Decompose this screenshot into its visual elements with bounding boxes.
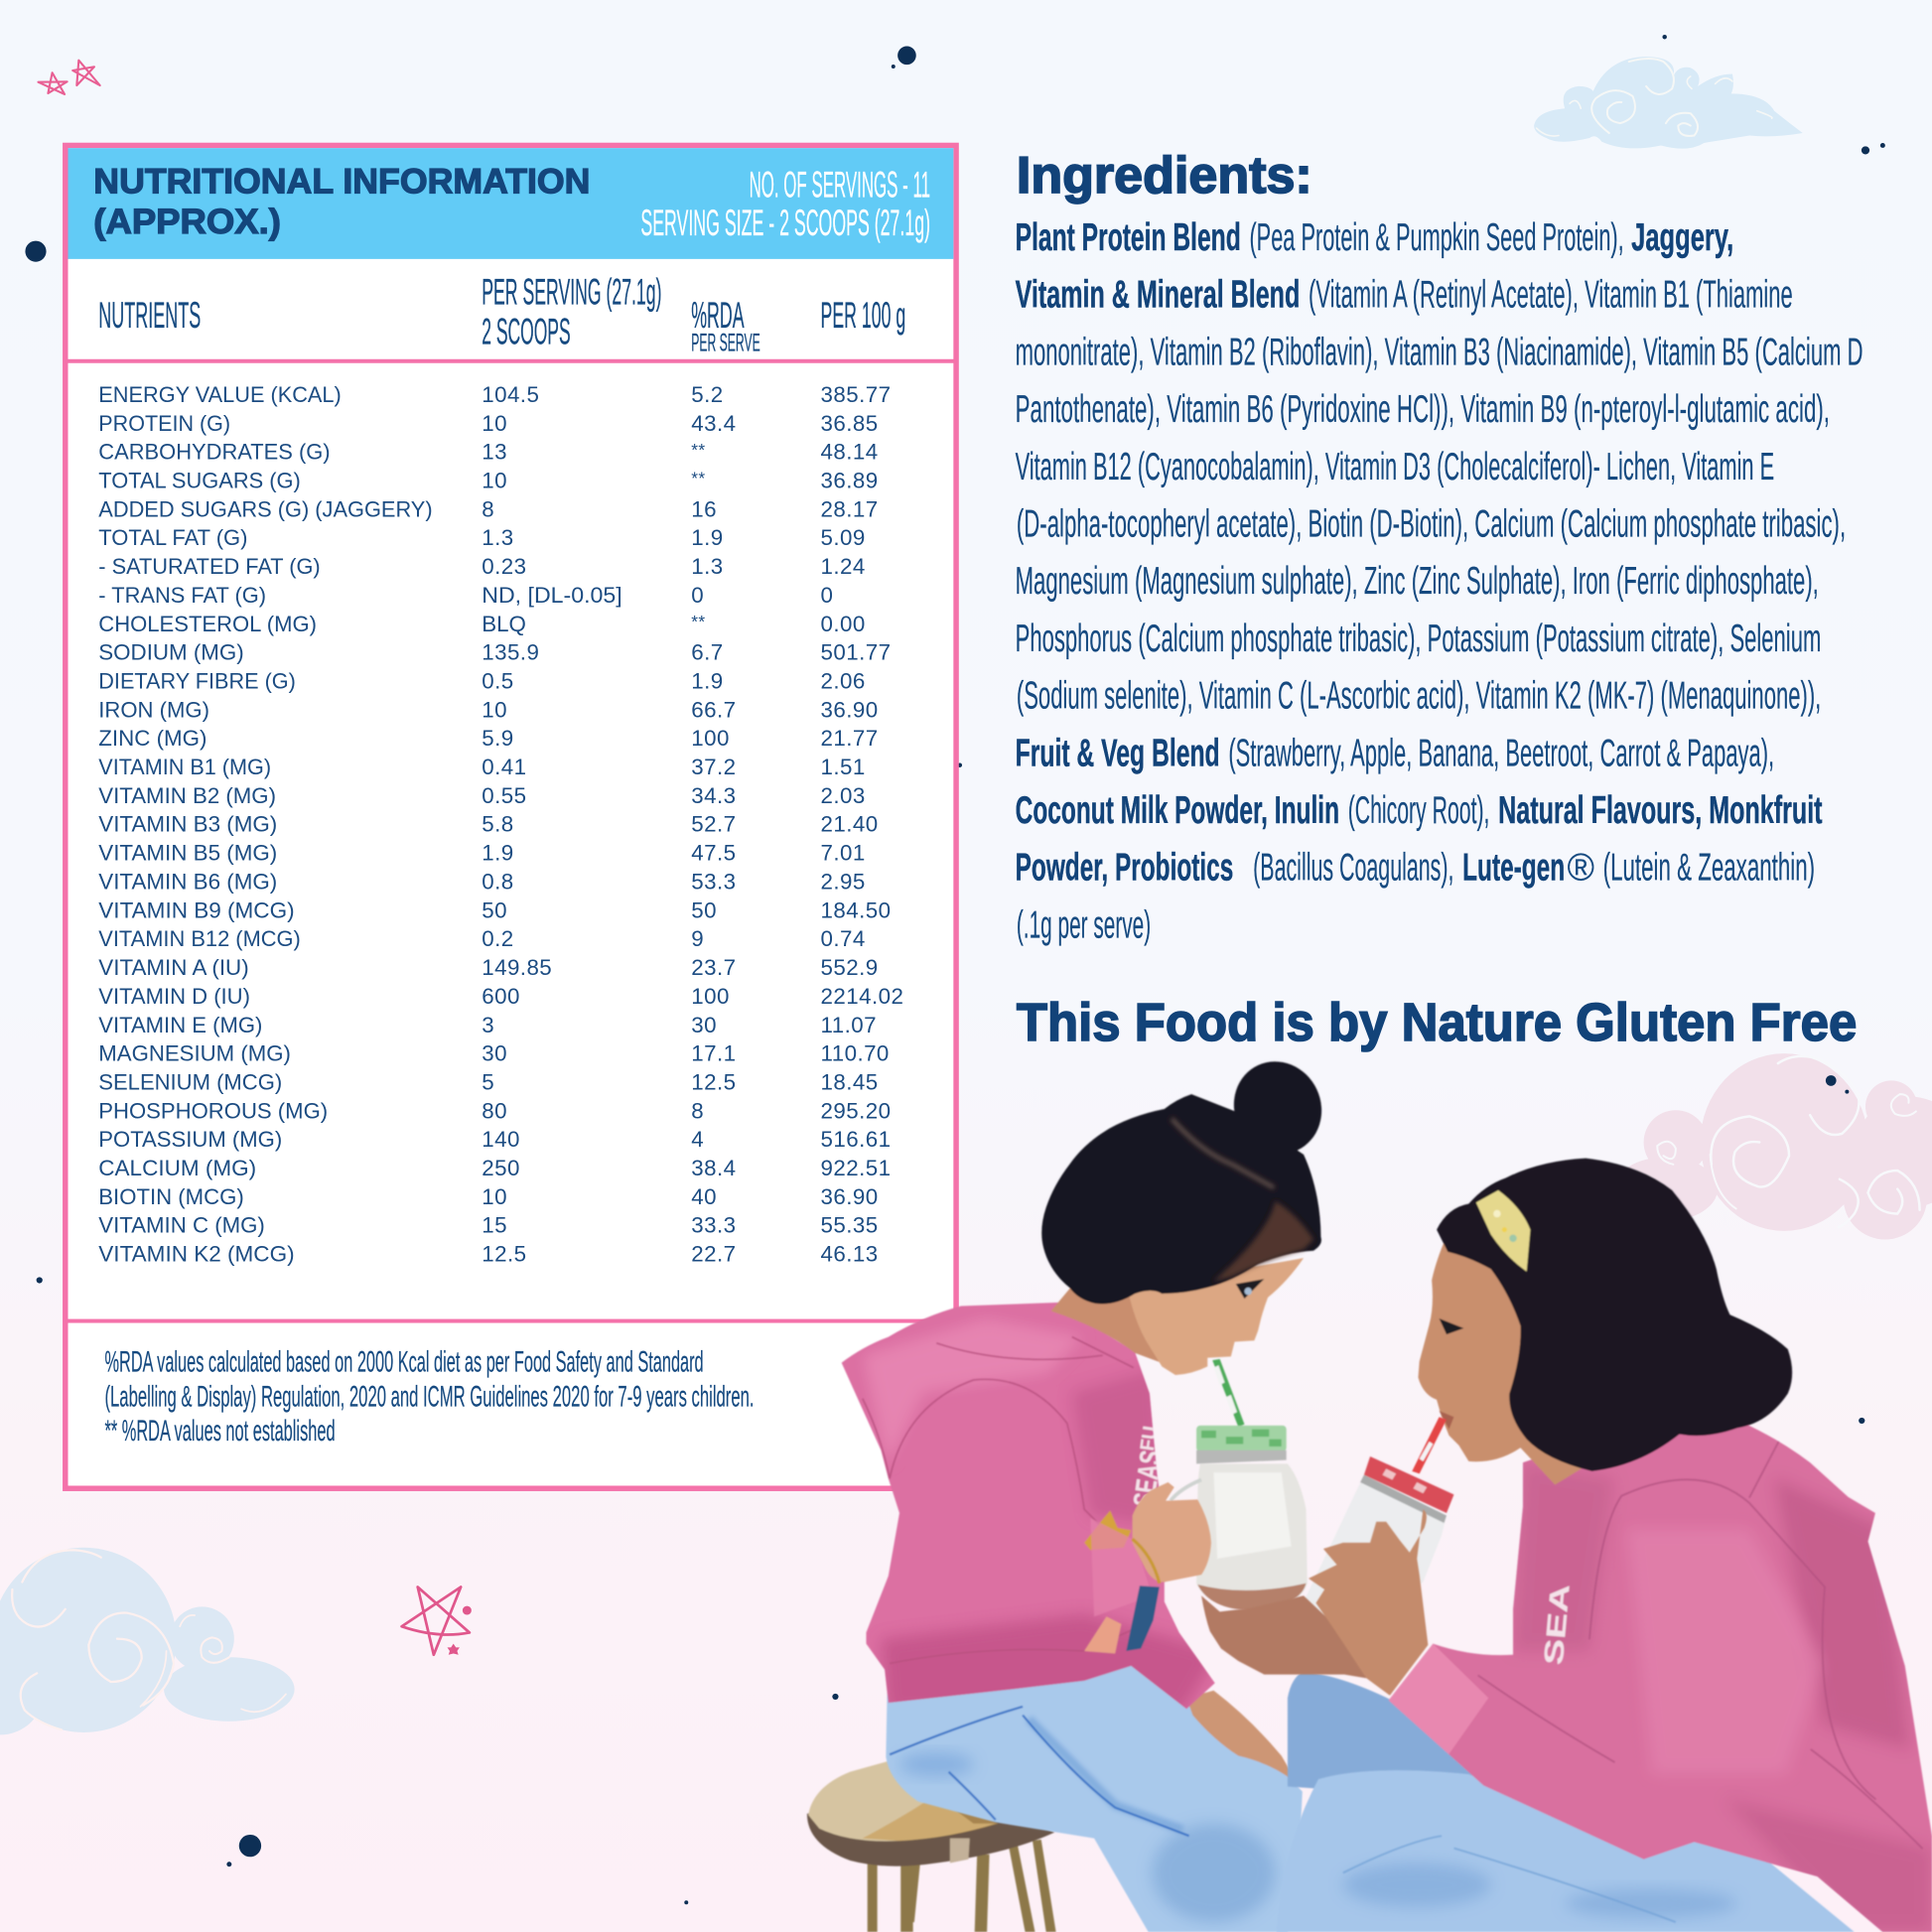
ingredients text block: Lute-gen <box>1462 847 1565 890</box>
nutrient rows: 100 <box>691 726 730 751</box>
nutrient rows: 2.06 <box>821 669 866 694</box>
nutrient rows: DIETARY FIBRE (G) <box>98 669 296 694</box>
nutrient rows: VITAMIN B12 (MCG) <box>98 926 301 951</box>
hair <box>1041 1094 1321 1304</box>
nutrient rows: 12.5 <box>691 1069 736 1094</box>
nutrient rows: 135.9 <box>482 640 539 665</box>
column headings <box>98 271 905 357</box>
ingredients text block: Fruit & Veg Blend <box>1016 732 1220 774</box>
ingredients text block: Plant Protein Blend <box>1016 216 1241 259</box>
nutrient rows: 5.2 <box>691 382 724 407</box>
nutrient rows: 100 <box>691 984 730 1009</box>
nutrient rows: ND, [DL-0.05] <box>482 583 622 608</box>
nutrient rows: 15 <box>482 1213 507 1238</box>
nutrient rows: 0.8 <box>482 869 514 894</box>
column headings: 2 SCOOPS <box>482 311 571 352</box>
nutrient rows: 37.2 <box>691 755 736 779</box>
nutrient rows: 0.23 <box>482 554 526 579</box>
column headings: %RDA <box>691 294 745 336</box>
nutrient rows: 47.5 <box>691 841 736 866</box>
cloud: bottom left <box>0 1548 295 1734</box>
cuff pattern <box>1126 1586 1160 1651</box>
nutrient rows: ** <box>691 440 706 460</box>
nutrient rows: 40 <box>691 1184 717 1209</box>
nutrient rows: 1.9 <box>691 525 724 550</box>
nutrient rows: ** <box>691 469 706 488</box>
photo: left jar with green lid <box>1171 1359 1308 1610</box>
nutrient rows: VITAMIN D (IU) <box>98 984 250 1009</box>
nutrient rows: ZINC (MG) <box>98 726 207 751</box>
gold bangle <box>1133 1539 1160 1584</box>
title <box>93 163 590 241</box>
headband <box>1476 1190 1530 1272</box>
face <box>1418 1242 1595 1484</box>
nutrient rows: SODIUM (MG) <box>98 640 244 665</box>
nutrient rows: VITAMIN B1 (MG) <box>98 755 271 779</box>
nutrient rows: 0.5 <box>482 669 514 694</box>
ingredients text block: Jaggery, <box>1631 216 1733 259</box>
nutrient rows: 516.61 <box>821 1127 891 1152</box>
ingredients text block: (.1g per serve) <box>1017 903 1151 946</box>
nutrient rows: 10 <box>482 411 507 436</box>
heading: gluten free: This Food is by Nature Gluten Free <box>1017 994 1857 1052</box>
nutrient rows: 36.90 <box>821 697 879 722</box>
nutrient rows: 11.07 <box>821 1013 877 1037</box>
hoodie <box>842 1303 1220 1713</box>
nutrient rows: 250 <box>482 1156 520 1180</box>
nutrient rows: ENERGY VALUE (KCAL) <box>98 382 342 407</box>
nutrient rows: 36.85 <box>821 411 879 436</box>
front leg <box>1277 1770 1855 1932</box>
footnote: (Labelling & Display) Regulation, 2020 and ICMR Guidelines 2020 for 7-9 years children. <box>104 1381 755 1414</box>
nutrient rows: 55.35 <box>821 1213 879 1238</box>
nutrient rows: VITAMIN B9 (MCG) <box>98 897 295 922</box>
nutrient rows: 0.00 <box>821 612 866 636</box>
cloud: top right <box>1534 57 1803 149</box>
nutrient rows: 12.5 <box>482 1242 526 1267</box>
nutrient rows: 0.41 <box>482 755 526 779</box>
table header band <box>69 148 953 259</box>
ingredients text block: Powder, Probiotics <box>1016 847 1233 890</box>
nutrient rows: 1.3 <box>482 525 514 550</box>
nutrient rows: 1.51 <box>821 755 866 779</box>
eye and lips <box>1440 1318 1463 1430</box>
hoodie: FU <box>1137 1425 1162 1452</box>
panel: nutrition table <box>66 145 956 1488</box>
nutrient rows: BLQ <box>482 612 526 636</box>
nutrient rows: VITAMIN E (MG) <box>98 1013 262 1037</box>
nutrient rows: - SATURATED FAT (G) <box>98 554 321 579</box>
nutrient rows: 5.9 <box>482 726 514 751</box>
nutrient rows: 6.7 <box>691 640 724 665</box>
nutrient rows: 501.77 <box>821 640 891 665</box>
nutrient rows: 21.40 <box>821 812 879 837</box>
table header band: NO. OF SERVINGS - 11 <box>750 164 930 206</box>
nutrient rows: MAGNESIUM (MG) <box>98 1041 291 1066</box>
nutrient rows: 30 <box>691 1013 717 1037</box>
nutrient rows: 104.5 <box>482 382 539 407</box>
jeans <box>886 1663 1303 1932</box>
nutrient rows: 5.09 <box>821 525 866 550</box>
nutrient rows: CARBOHYDRATES (G) <box>98 440 331 465</box>
nutrient rows: 21.77 <box>821 726 879 751</box>
icon: two small stars <box>38 61 100 94</box>
nutrient rows <box>98 382 903 1267</box>
nutrient rows: 295.20 <box>821 1098 891 1123</box>
nutrient rows: 80 <box>482 1098 507 1123</box>
nutrient rows: 110.70 <box>821 1041 890 1066</box>
nutrient rows: VITAMIN B6 (MG) <box>98 869 277 894</box>
ingredients text block: Vitamin & Mineral Blend <box>1016 274 1300 317</box>
nutrient rows: 23.7 <box>691 955 736 980</box>
nutrient rows: 52.7 <box>691 812 736 837</box>
nutrient rows: VITAMIN C (MG) <box>98 1213 265 1238</box>
footnote: ** %RDA values not established <box>104 1415 336 1448</box>
table header band: SERVING SIZE - 2 SCOOPS (27.1g) <box>640 202 930 243</box>
nutrient rows: - TRANS FAT (G) <box>98 583 266 608</box>
face <box>1128 1258 1304 1375</box>
nutrient rows: VITAMIN B3 (MG) <box>98 812 277 837</box>
nutrient rows: 1.24 <box>821 554 866 579</box>
table box <box>66 145 956 1488</box>
hair <box>1437 1159 1792 1471</box>
sleeve cuff <box>1090 1518 1152 1616</box>
title: NUTRITIONAL INFORMATION <box>93 163 590 201</box>
photo: left child <box>842 1047 1336 1932</box>
nutrient rows: 22.7 <box>691 1242 736 1267</box>
nutrient rows: 1.9 <box>482 841 514 866</box>
nutrient rows: 1.3 <box>691 554 724 579</box>
hoodie patches <box>1084 1511 1131 1654</box>
column headings: NUTRIENTS <box>98 294 201 336</box>
hoodie <box>1389 1417 1932 1932</box>
jar handle <box>1171 1480 1201 1501</box>
nutrient rows: CHOLESTEROL (MG) <box>98 612 317 636</box>
nutrient rows: 36.89 <box>821 468 879 492</box>
nutrient rows: 0.74 <box>821 926 866 951</box>
nutrient rows: 385.77 <box>821 382 891 407</box>
nutrient rows: 38.4 <box>691 1156 736 1180</box>
ingredients text block: (Bacillus Coagulans), <box>1253 847 1453 890</box>
rear leg <box>1288 1672 1509 1801</box>
nutrient rows: 2.03 <box>821 783 866 808</box>
nutrient rows: PROTEIN (G) <box>98 411 230 436</box>
nutrient rows: 33.3 <box>691 1213 736 1238</box>
nutrient rows: 9 <box>691 926 704 951</box>
left child's hand <box>1133 1482 1211 1583</box>
nutrient rows: 50 <box>482 897 507 922</box>
footnote <box>104 1346 755 1448</box>
nutrient rows: 18.45 <box>821 1069 879 1094</box>
nutrient rows: VITAMIN B2 (MG) <box>98 783 276 808</box>
title: (APPROX.) <box>93 204 281 241</box>
ingredients text block: ® <box>1568 847 1594 890</box>
nutrient rows: 43.4 <box>691 411 736 436</box>
nutrient rows: 46.13 <box>821 1242 879 1267</box>
footnote: %RDA values calculated based on 2000 Kcal diet as per Food Safety and Standard <box>104 1346 704 1379</box>
nutrient rows: 149.85 <box>482 955 552 980</box>
nutrient rows: 140 <box>482 1127 520 1152</box>
nutrient rows: 34.3 <box>691 783 736 808</box>
ingredients text block: (Chicory Root), <box>1348 789 1489 832</box>
icon: large star <box>402 1587 472 1655</box>
nutrient rows: 28.17 <box>821 496 879 521</box>
nutrient rows: 2.95 <box>821 869 866 894</box>
column headings: PER SERVING (27.1g) <box>482 271 661 313</box>
nutrient rows: 10 <box>482 697 507 722</box>
nutrient rows: 0 <box>691 583 704 608</box>
photo: stool <box>807 1760 1056 1932</box>
nutrient rows: 50 <box>691 897 717 922</box>
nutrient rows: ADDED SUGARS (G) (JAGGERY) <box>98 496 433 521</box>
nutrient rows: VITAMIN A (IU) <box>98 955 249 980</box>
nutrient rows: 53.3 <box>691 869 736 894</box>
nutrient rows: 10 <box>482 468 507 492</box>
heading: ingredients: Ingredients: <box>1017 147 1312 205</box>
nutrient rows: 7.01 <box>821 841 866 866</box>
nutrient rows: PHOSPHOROUS (MG) <box>98 1098 328 1123</box>
nutrient rows: SELENIUM (MCG) <box>98 1069 282 1094</box>
nutrient rows: IRON (MG) <box>98 697 209 722</box>
nutrient rows: TOTAL FAT (G) <box>98 525 247 550</box>
photo: hands <box>1133 1482 1428 1696</box>
nutrient rows: BIOTIN (MCG) <box>98 1184 244 1209</box>
panel: nutrition table: PER 100 g <box>821 294 905 336</box>
hoodie: SEA <box>1538 1583 1576 1666</box>
nutrient rows: VITAMIN B5 (MG) <box>98 841 277 866</box>
nutrient rows: 2214.02 <box>821 984 903 1009</box>
upper hand <box>1309 1509 1428 1696</box>
nutrient rows: 8 <box>482 496 494 521</box>
nutrient rows: 0 <box>821 583 833 608</box>
nutrient rows: POTASSIUM (MG) <box>98 1127 282 1152</box>
lower hand <box>1201 1595 1366 1678</box>
nutrient rows: 48.14 <box>821 440 879 465</box>
cloud: right pink <box>1614 1053 1932 1240</box>
hand on knee <box>1186 1691 1299 1785</box>
neck <box>1051 1276 1169 1365</box>
eye <box>1236 1279 1264 1299</box>
nutrient rows: CALCIUM (MG) <box>98 1156 256 1180</box>
ingredients text block <box>1016 216 1863 946</box>
nutrient rows: 922.51 <box>821 1156 891 1180</box>
ingredients text block: Coconut Milk Powder, Inulin <box>1016 789 1339 832</box>
nutrient rows: 30 <box>482 1041 507 1066</box>
nutrient rows: 16 <box>691 496 717 521</box>
nutrient rows: 10 <box>482 1184 507 1209</box>
ingredients text block: (Pea Protein & Pumpkin Seed Protein), <box>1249 216 1624 259</box>
nutrient rows: 17.1 <box>691 1041 736 1066</box>
nutrient rows: 5 <box>482 1069 494 1094</box>
nutrient rows: ** <box>691 612 706 631</box>
nutrient rows: 1.9 <box>691 669 724 694</box>
nutrient rows: VITAMIN K2 (MCG) <box>98 1242 295 1267</box>
nutrient rows: 5.8 <box>482 812 514 837</box>
nutrient rows: 66.7 <box>691 697 736 722</box>
hoodie: SEAS <box>1128 1449 1169 1509</box>
nutrient rows: 13 <box>482 440 507 465</box>
nutrient rows: 4 <box>691 1127 704 1152</box>
nutrient rows: 552.9 <box>821 955 879 980</box>
nutrient rows: 36.90 <box>821 1184 879 1209</box>
photo: right child <box>1277 1159 1932 1932</box>
photo: right jar with red lid <box>1304 1417 1453 1635</box>
nutrient rows: 3 <box>482 1013 494 1037</box>
nutrient rows: 0.2 <box>482 926 514 951</box>
nutrient rows: 0.55 <box>482 783 526 808</box>
column headings: PER SERVE <box>691 331 760 357</box>
servings note <box>640 164 930 243</box>
nutrient rows: 600 <box>482 984 520 1009</box>
nutrient rows: 8 <box>691 1098 704 1123</box>
nutrient rows: 184.50 <box>821 897 891 922</box>
nutrient rows: TOTAL SUGARS (G) <box>98 468 301 492</box>
